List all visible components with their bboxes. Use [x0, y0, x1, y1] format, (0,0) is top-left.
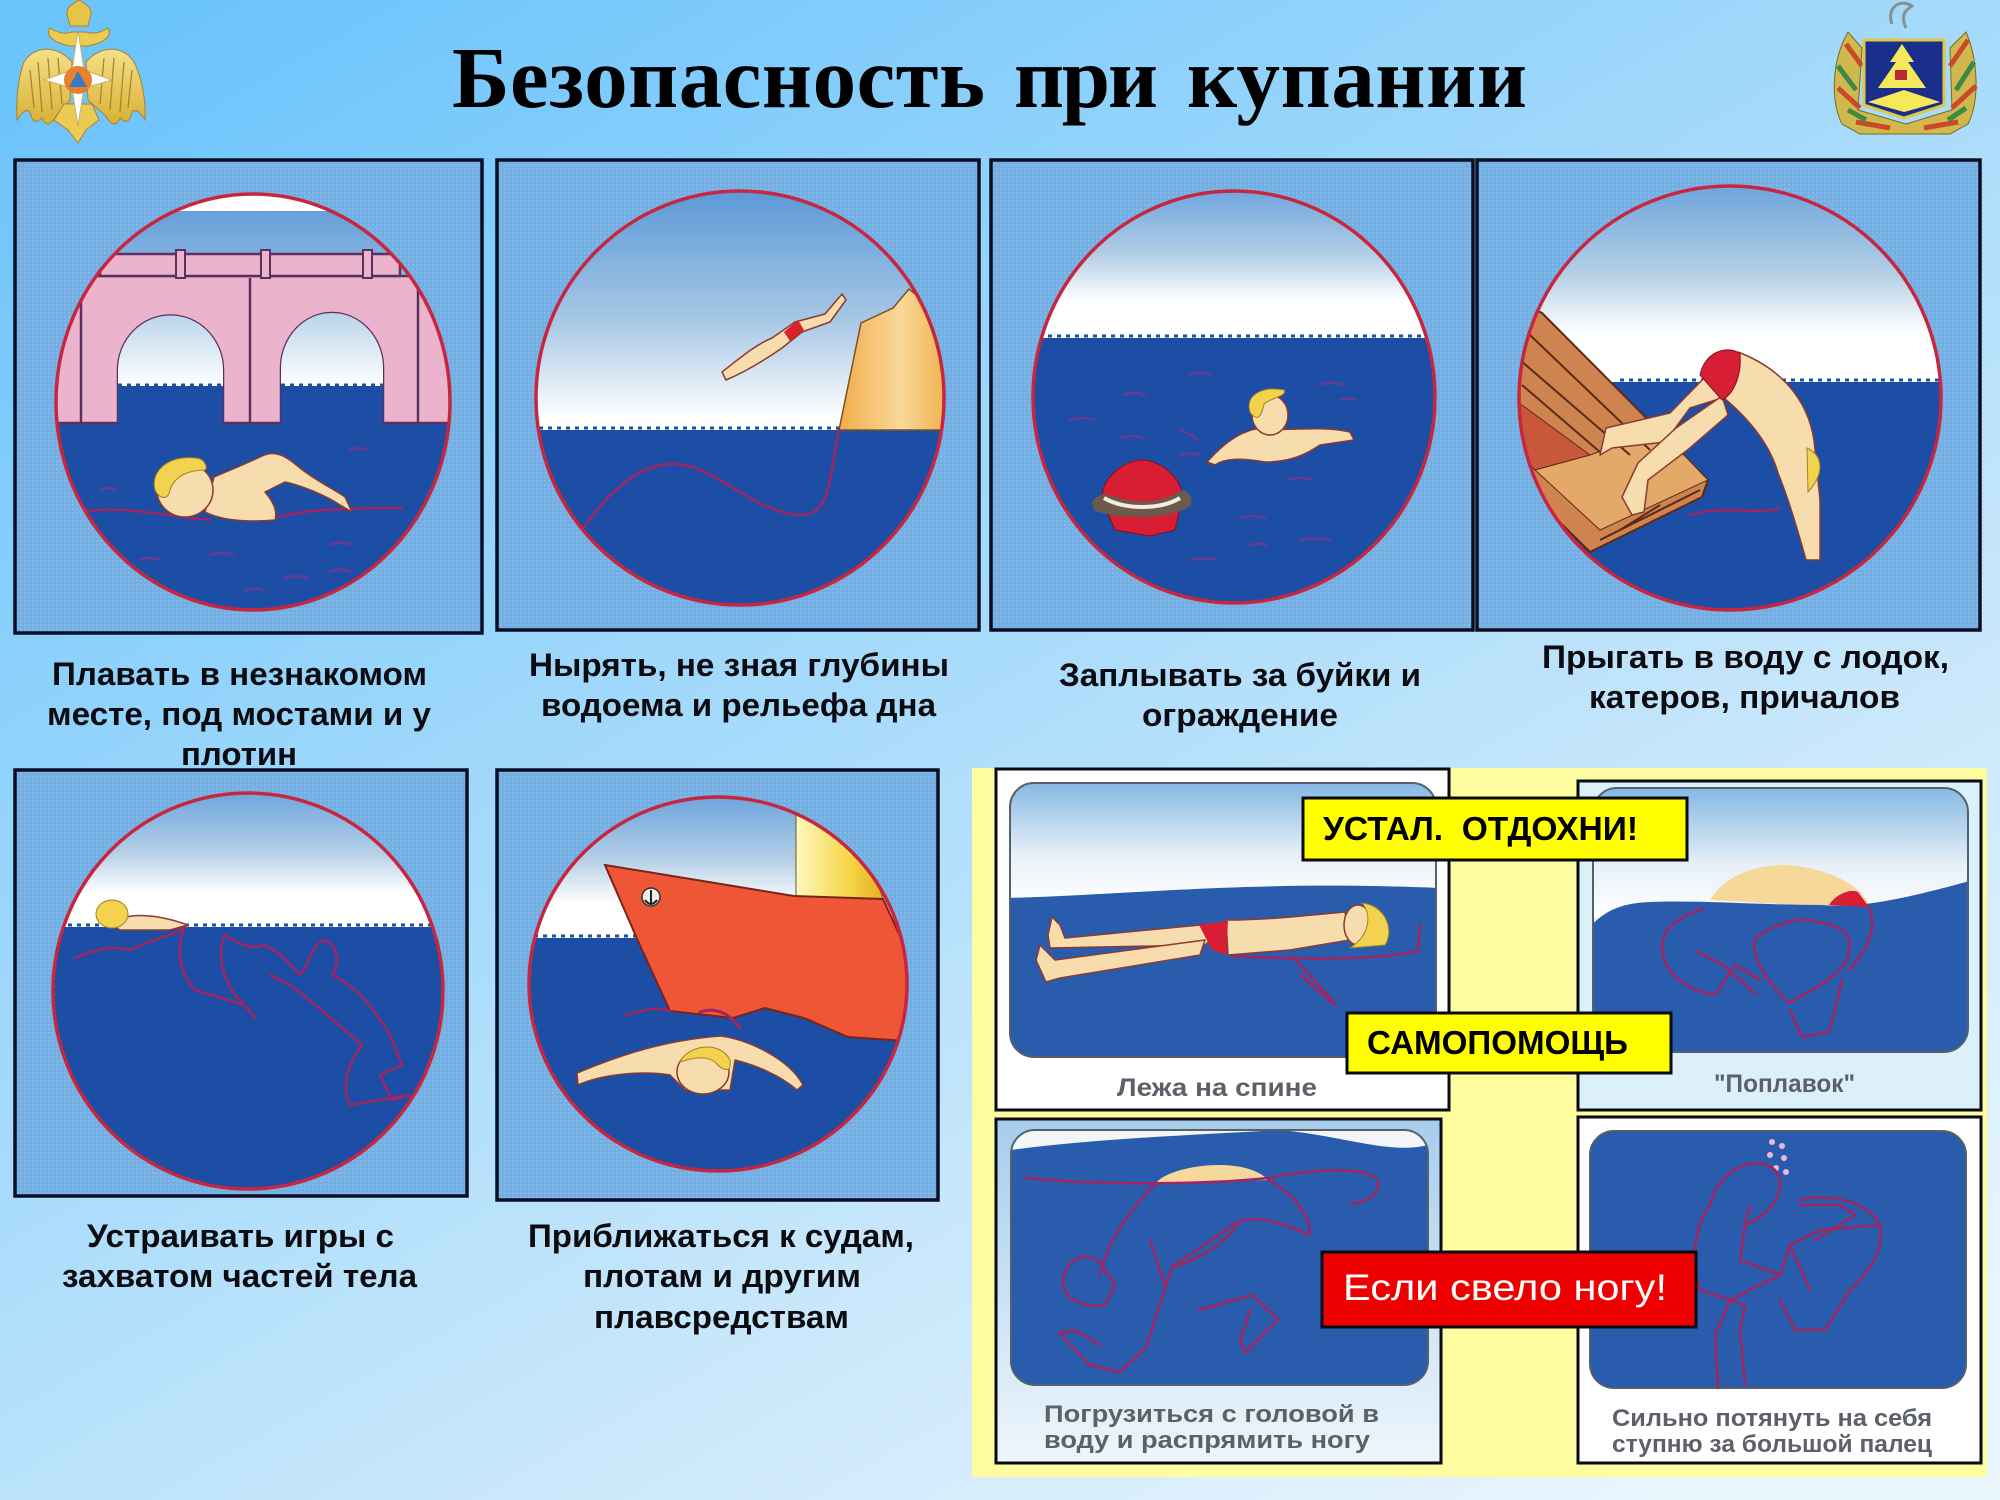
- scene: diver from cliff: [530, 188, 960, 610]
- icon: bubbles: [1767, 1139, 1789, 1175]
- scene: jumping off boat: [1515, 184, 1945, 612]
- caption: pull: ступню за большой палец: [1612, 1431, 1932, 1458]
- icon: regional coat of arms: [1834, 3, 1976, 134]
- label: self-help: САМОПОМОЩЬ: [1367, 1024, 1628, 1061]
- scene: swimmer and buoy: [1030, 188, 1440, 608]
- caption 2: Нырять, не зная глубины: [529, 647, 949, 683]
- caption: submerge: Погрузиться с головой в: [1044, 1401, 1379, 1428]
- caption 5: захватом частей тела: [62, 1258, 417, 1294]
- label: cramp: Если свело ногу!: [1343, 1267, 1667, 1308]
- scene: underwater grabbing: [50, 790, 450, 1192]
- label: self-help: [1347, 1013, 1671, 1073]
- label: cramp: [1322, 1252, 1696, 1327]
- caption 1: месте, под мостами и у: [47, 696, 431, 732]
- title: купании: [1187, 29, 1527, 126]
- caption 5: [62, 1218, 417, 1294]
- caption 6: [528, 1218, 914, 1335]
- caption 4: [1542, 639, 1949, 715]
- caption 5: Устраивать игры с: [87, 1218, 394, 1254]
- panel: self-help: [972, 768, 1987, 1477]
- title: Безопасность: [452, 29, 985, 126]
- card: submerge head: [996, 1119, 1441, 1463]
- card: float: [1578, 781, 1981, 1110]
- caption 4: Прыгать в воду с лодок,: [1542, 639, 1949, 675]
- caption 1: плотин: [181, 736, 297, 772]
- caption 2: [529, 647, 949, 723]
- panel: diving: [497, 160, 979, 630]
- card: pull foot: [1578, 1117, 1981, 1463]
- panel: jumping from boats: [1477, 160, 1980, 630]
- caption: pull: Сильно потянуть на себя: [1612, 1405, 1932, 1432]
- caption 6: Приближаться к судам,: [528, 1218, 914, 1254]
- title: при: [1014, 29, 1158, 126]
- caption: lying: Лежа на спине: [1117, 1074, 1317, 1102]
- caption: submerge: воду и распрямить ногу: [1044, 1427, 1371, 1454]
- scene: ship and swimmer: [525, 795, 920, 1173]
- panel: approaching vessels: [497, 770, 938, 1200]
- label: tired, rest: УСТАЛ. ОТДОХНИ!: [1323, 810, 1638, 847]
- caption 6: плавсредствам: [594, 1299, 849, 1335]
- caption: float: "Поплавок": [1714, 1070, 1855, 1098]
- icon: EMERCOM emblem: [17, 0, 145, 143]
- label: tired, rest: [1303, 798, 1687, 860]
- caption 2: водоема и рельефа дна: [541, 687, 936, 723]
- caption 6: плотам и другим: [583, 1258, 861, 1294]
- panel: beyond buoys: [991, 160, 1473, 630]
- caption 4: катеров, причалов: [1589, 679, 1900, 715]
- caption: pull: [1612, 1405, 1932, 1458]
- caption 3: ограждение: [1142, 697, 1338, 733]
- title: [452, 29, 1527, 126]
- scene: bridge and swimmer: [50, 190, 460, 613]
- caption 1: [47, 656, 431, 772]
- caption 3: Заплывать за буйки и: [1059, 657, 1421, 693]
- caption 3: [1059, 657, 1421, 733]
- panel: grabbing games: [15, 770, 467, 1196]
- card: lying on back: [996, 769, 1449, 1110]
- caption: submerge: [1044, 1401, 1379, 1454]
- panel: unknown place: [15, 160, 482, 633]
- caption 1: Плавать в незнакомом: [52, 656, 427, 692]
